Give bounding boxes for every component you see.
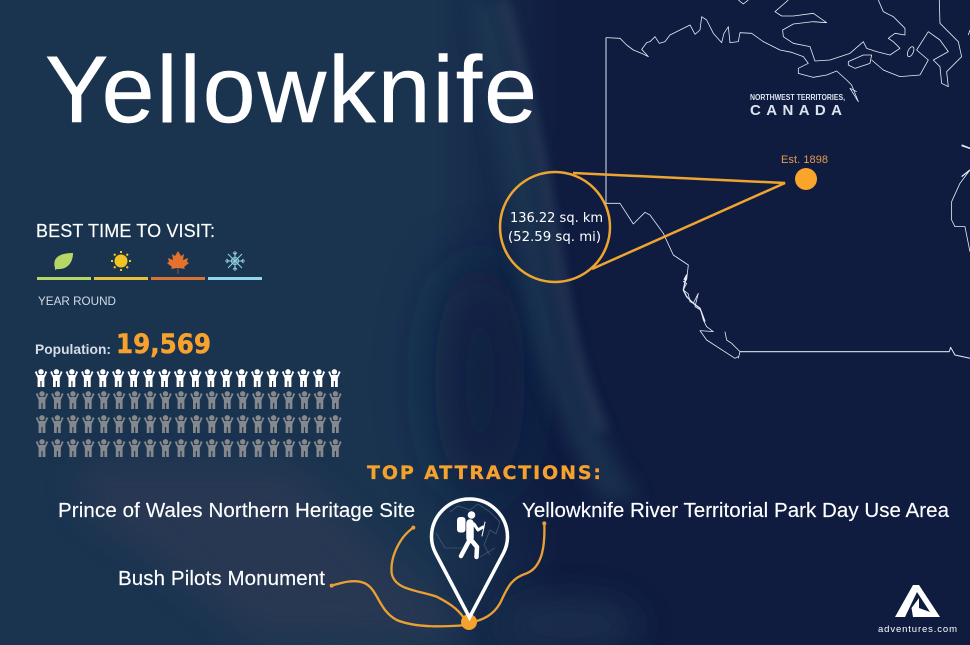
- pictogram: people: [35, 369, 342, 457]
- best time to visit: [36, 221, 262, 308]
- population: [35, 329, 342, 457]
- map label: CANADA: [750, 102, 842, 119]
- icon: spring leaf: [54, 253, 73, 270]
- season bars: [37, 277, 262, 280]
- top attractions heading: TOP ATTRACTIONS:: [367, 462, 601, 484]
- location marker: [781, 154, 828, 190]
- icon: autumn maple leaf: [167, 251, 189, 274]
- attraction labels: Bush Pilots Monument: [118, 567, 325, 590]
- title: Yellowknife: [45, 37, 537, 143]
- attraction labels: Prince of Wales Northern Heritage Site: [58, 499, 415, 522]
- icon: winter snowflake: [225, 251, 245, 271]
- icon: hiker: [457, 511, 485, 557]
- attraction labels: Yellowknife River Territorial Park Day Use Area: [522, 499, 950, 522]
- callout: city area: 136.22 sq. km: [510, 211, 603, 226]
- best time to visit: BEST TIME TO VISIT:: [36, 221, 215, 241]
- location marker: Est. 1898: [781, 154, 828, 166]
- map: Canada outline: [606, 0, 970, 358]
- map label: [750, 93, 845, 119]
- population: Population:: [35, 341, 111, 357]
- population: 19,569: [116, 329, 211, 360]
- map pin with hiker: [432, 499, 508, 618]
- connector routes: [330, 521, 546, 626]
- attraction labels: [58, 499, 950, 590]
- icon: summer sun: [111, 251, 131, 271]
- best time to visit: YEAR ROUND: [38, 294, 116, 308]
- logo: adventures.com: [878, 585, 957, 635]
- map label: NORTHWEST TERRITORIES,: [750, 93, 845, 102]
- callout: city area: [500, 172, 785, 282]
- route hub dot: [461, 614, 477, 630]
- callout: city area: (52.59 sq. mi): [508, 230, 601, 245]
- logo: adventures.com: adventures.com: [878, 624, 957, 635]
